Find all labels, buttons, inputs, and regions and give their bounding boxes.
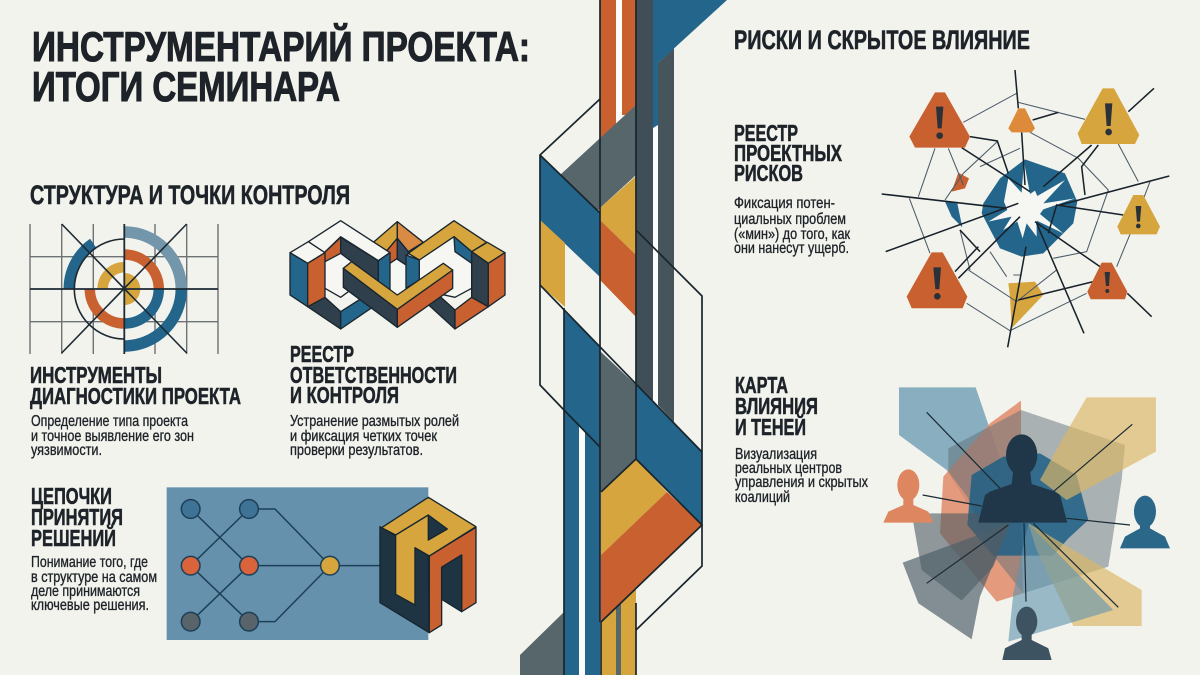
icon: warning bottom left <box>907 252 967 308</box>
icon: diagnostic target grid <box>30 224 218 354</box>
diagram: decision chain panel <box>167 487 476 640</box>
title: ИТОГИ СЕМИНАРА <box>32 63 340 110</box>
icon: person right <box>1120 496 1170 548</box>
text block: responsibility register: ОТВЕТСТВЕННОСТИ <box>290 362 457 388</box>
text block: project risk register: РИСКОВ <box>734 160 803 186</box>
text block: diagnostic tools: Определение типа проекта <box>31 413 188 430</box>
text block: project risk register: РЕЕСТР <box>734 120 798 146</box>
text block: responsibility register: РЕЕСТР <box>290 341 354 367</box>
text block: responsibility register: И КОНТРОЛЯ <box>290 382 399 408</box>
text block: influence and shadows map: ВЛИЯНИЯ <box>735 393 818 419</box>
text block: influence and shadows map: управления и скрытых <box>735 474 868 491</box>
icon: isometric block <box>380 497 476 633</box>
text block: influence and shadows map <box>735 372 868 506</box>
text block: responsibility register: проверки результатов. <box>290 442 423 459</box>
text block: project risk register: они нанесут ущерб. <box>734 240 849 257</box>
text block: decision chains: Понимание того, где <box>31 554 148 571</box>
text block: project risk register: циальных проблем <box>734 211 846 228</box>
text block: influence and shadows map: И ТЕНЕЙ <box>735 413 806 440</box>
icon: warning top left <box>909 92 970 148</box>
icon: small orange triangle <box>1008 108 1035 132</box>
text block: decision chains: РЕШЕНИЙ <box>31 524 116 551</box>
diagram: influence map with silhouettes <box>883 387 1170 660</box>
text block: responsibility register: Устранение размытых ролей <box>290 413 459 430</box>
icon: central person <box>978 434 1067 523</box>
text block: influence and shadows map: Визуализация <box>735 446 817 463</box>
title <box>32 22 530 110</box>
icon: person bottom <box>1002 607 1052 660</box>
text block: diagnostic tools: и точное выявление его зон <box>31 428 194 445</box>
text block: decision chains: в структуре на самом <box>31 569 157 586</box>
icon: warning top right <box>1078 88 1139 144</box>
heading: risks and hidden influence: РИСКИ И СКРЫТОЕ ВЛИЯНИЕ <box>734 25 1030 55</box>
text block: responsibility register <box>290 341 459 459</box>
heading: structure and control points: СТРУКТУРА И ТОЧКИ КОНТРОЛЯ <box>30 180 350 210</box>
title: ИНСТРУМЕНТАРИЙ ПРОЕКТА: <box>32 22 530 70</box>
icon: warning bottom right <box>1087 263 1127 299</box>
text block: diagnostic tools: ДИАГНОСТИКИ ПРОЕКТА <box>30 383 241 409</box>
text block: decision chains: деле принимаются <box>31 583 140 600</box>
central geometric ribbon <box>520 0 727 675</box>
text block: project risk register: Фиксация потен- <box>734 195 835 212</box>
text block: influence and shadows map: КАРТА <box>735 372 788 398</box>
text block: influence and shadows map: реальных центров <box>735 460 842 477</box>
text block: decision chains: ЦЕПОЧКИ <box>31 483 112 509</box>
icon: person left <box>883 469 933 523</box>
text block: diagnostic tools: уязвимости. <box>31 442 102 459</box>
icon: interlocked isometric links <box>290 221 505 329</box>
text block: decision chains <box>31 483 157 614</box>
text block: project risk register <box>734 120 851 257</box>
text block: responsibility register: и фиксация четких точек <box>290 428 438 445</box>
text block: decision chains: ключевые решения. <box>31 597 149 614</box>
text block: diagnostic tools: ИНСТРУМЕНТЫ <box>30 362 162 388</box>
text block: project risk register: ПРОЕКТНЫХ <box>734 140 842 166</box>
text block: project risk register: («мин») до того, как <box>734 226 851 243</box>
text block: influence and shadows map: коалиций <box>735 489 790 506</box>
text block: decision chains: ПРИНЯТИЯ <box>31 504 123 530</box>
icon: warning right <box>1117 195 1160 234</box>
text block: diagnostic tools <box>30 362 241 459</box>
diagram: risk web with warning signs <box>882 70 1169 347</box>
